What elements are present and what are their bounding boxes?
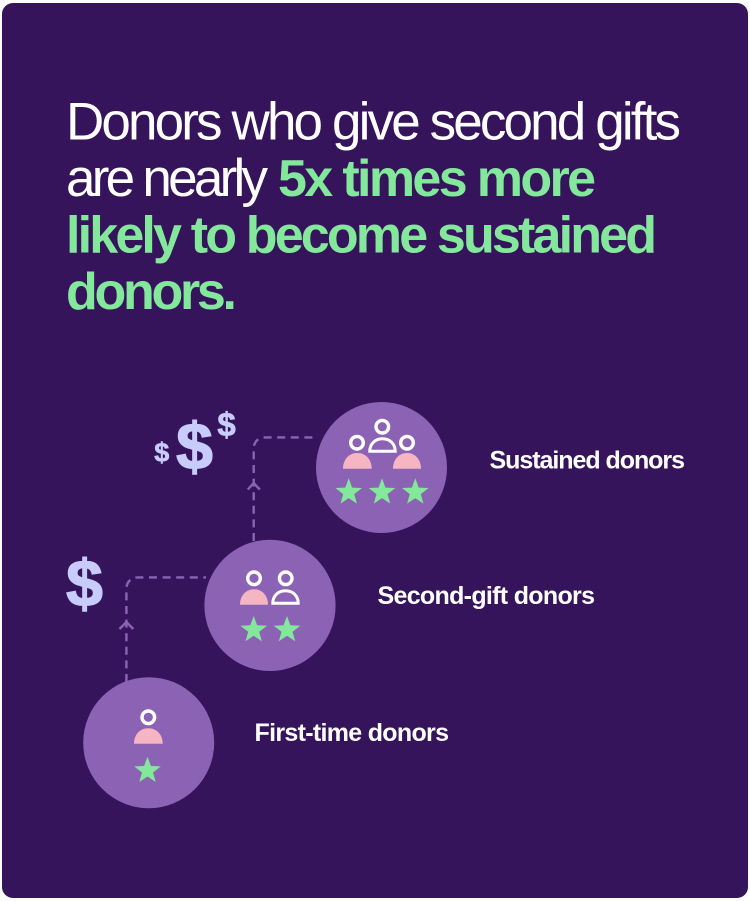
node: sustained donors (316, 402, 447, 533)
label: first-time donors: First-time donors (254, 719, 449, 747)
icon: dollar signs, large group: $ (217, 406, 236, 443)
title: Donors who give second gifts (66, 92, 681, 151)
title: 5x times more (278, 150, 596, 208)
icon: dollar signs, large group: $ (176, 409, 213, 483)
icon: two stars (240, 616, 300, 641)
title: are nearly (66, 149, 268, 208)
icon: two donors (240, 572, 298, 605)
icon: three donors (343, 420, 421, 469)
icon: one donor (134, 711, 163, 744)
arrow: first-time to second-gift (120, 577, 206, 682)
label: second-gift donors: Second-gift donors (378, 582, 595, 610)
label: sustained donors: Sustained donors (490, 446, 685, 474)
icon: dollar signs, large group (154, 406, 236, 483)
icon: one star (134, 757, 161, 782)
icon: three stars (335, 478, 429, 504)
node: first-time donors (83, 677, 214, 808)
arrow: second-gift to sustained (248, 437, 318, 541)
title: donors. (66, 263, 237, 321)
title (66, 92, 681, 321)
icon: dollar signs, large group: $ (154, 438, 169, 468)
icon: dollar sign, single: $ (66, 546, 103, 620)
node: second-gift donors (204, 540, 336, 671)
title: likely to become sustained (66, 207, 657, 265)
